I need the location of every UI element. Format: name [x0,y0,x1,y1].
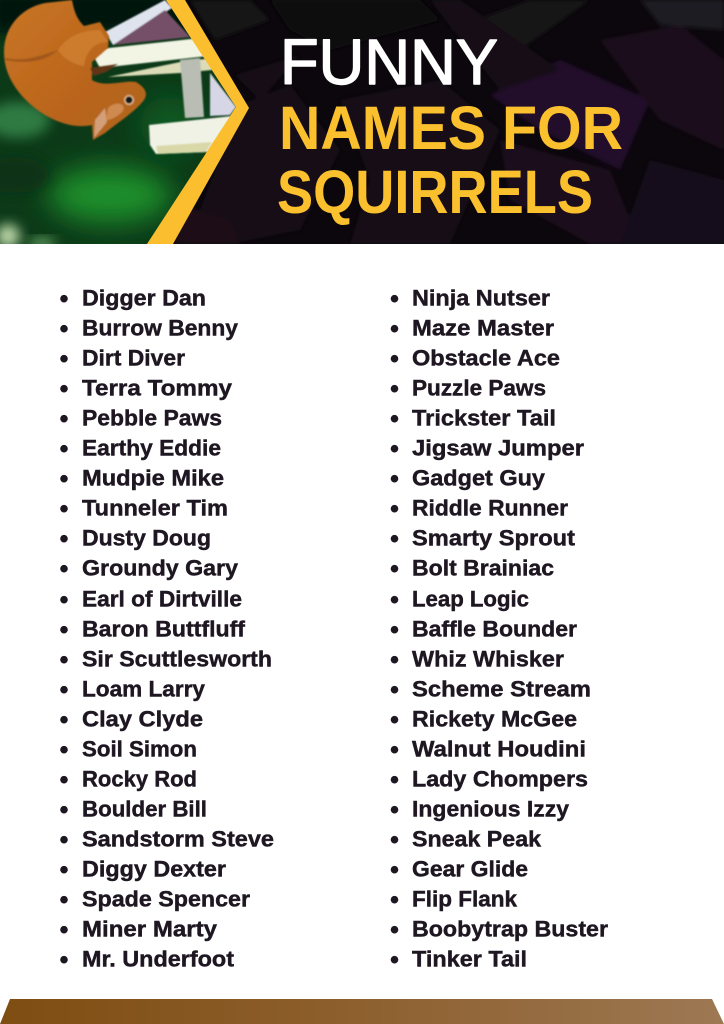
title line: FUNNY: FUNNY [280,26,498,98]
name: Walnut Houdini: Walnut Houdini [412,737,586,762]
name: Baffle Bounder: Baffle Bounder [412,617,577,642]
name: Earl of Dirtville: Earl of Dirtville [82,587,242,612]
name: Smarty Sprout: Smarty Sprout [412,526,576,551]
name: Earthy Eddie: Earthy Eddie [82,436,221,461]
name: Boulder Bill: Boulder Bill [82,797,207,822]
name: Sneak Peak: Sneak Peak [412,827,541,852]
name: Trickster Tail: Trickster Tail [412,406,556,431]
list: right column of names [391,286,608,972]
name: Mudpie Mike: Mudpie Mike [82,466,224,491]
name: Jigsaw Jumper: Jigsaw Jumper [412,436,584,461]
name: Gadget Guy: Gadget Guy [412,466,545,491]
title [277,26,623,226]
photo: squirrel on bird feeder [0,0,250,248]
name: Mr. Underfoot: Mr. Underfoot [82,947,235,972]
name: Groundy Gary: Groundy Gary [82,556,238,581]
name: Riddle Runner: Riddle Runner [412,496,568,521]
name: Miner Marty: Miner Marty [82,917,218,942]
name: Whiz Whisker: Whiz Whisker [412,647,564,672]
name: Rickety McGee: Rickety McGee [412,707,577,732]
dark geometric background [150,0,724,244]
name: Loam Larry: Loam Larry [82,677,205,702]
title line: SQUIRRELS: SQUIRRELS [277,158,593,226]
blurred green foliage [0,0,200,248]
name: Terra Tommy: Terra Tommy [82,376,233,401]
name: Soil Simon: Soil Simon [82,737,197,762]
name: Baron Buttfluff: Baron Buttfluff [82,617,246,642]
name: Maze Master: Maze Master [412,316,554,341]
name: Rocky Rod: Rocky Rod [82,767,197,792]
name: Flip Flank: Flip Flank [412,887,517,912]
name: Dusty Doug: Dusty Doug [82,526,211,551]
name: Sir Scuttlesworth: Sir Scuttlesworth [82,647,272,672]
bird feeder [90,0,236,154]
title line: NAMES FOR: NAMES FOR [279,94,623,162]
name: Pebble Paws: Pebble Paws [82,406,222,431]
footer bar [0,999,724,1024]
name: Bolt Brainiac: Bolt Brainiac [412,556,554,581]
name: Boobytrap Buster: Boobytrap Buster [412,917,608,942]
name: Spade Spencer: Spade Spencer [82,887,250,912]
name: Scheme Stream: Scheme Stream [412,677,591,702]
name: Leap Logic: Leap Logic [412,587,529,612]
name: Clay Clyde: Clay Clyde [82,707,203,732]
header banner [0,0,724,248]
yellow chevron [147,0,249,244]
name: Sandstorm Steve: Sandstorm Steve [82,827,274,852]
name: Diggy Dexter: Diggy Dexter [82,857,226,882]
name: Puzzle Paws: Puzzle Paws [412,376,546,401]
name: Digger Dan: Digger Dan [82,286,206,311]
name: Tunneler Tim: Tunneler Tim [82,496,228,521]
list: left column of names [60,286,274,972]
name: Dirt Diver: Dirt Diver [82,346,185,371]
squirrel [4,0,146,140]
name: Ninja Nutser: Ninja Nutser [412,286,550,311]
name: Tinker Tail: Tinker Tail [412,947,527,972]
name: Lady Chompers: Lady Chompers [412,767,588,792]
name: Gear Glide: Gear Glide [412,857,528,882]
name: Obstacle Ace: Obstacle Ace [412,346,560,371]
name: Ingenious Izzy: Ingenious Izzy [412,797,569,822]
name: Burrow Benny: Burrow Benny [82,316,238,341]
